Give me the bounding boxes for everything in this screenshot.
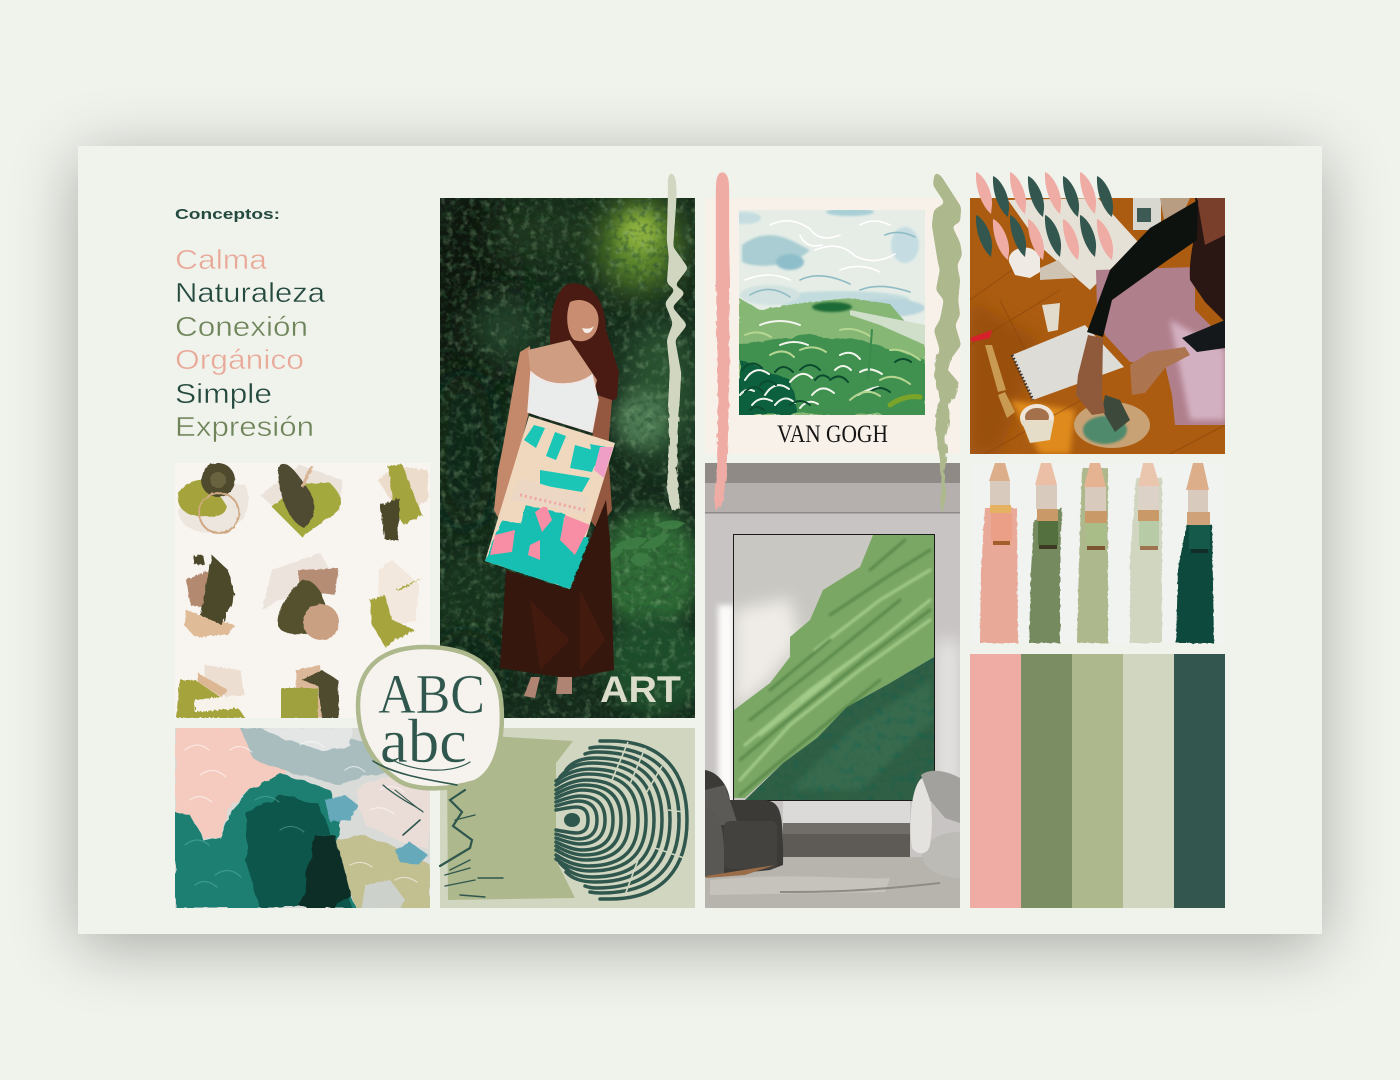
concept list: Naturaleza xyxy=(175,277,325,308)
panel: artist painting on floor xyxy=(970,198,1225,454)
fingerprint xyxy=(556,741,687,899)
framed artwork xyxy=(733,534,935,801)
coffee cup xyxy=(1020,404,1054,443)
mark 7: olive sweep xyxy=(176,665,245,718)
panel: paint brushes xyxy=(970,463,1225,643)
stroke: pale sage brush xyxy=(665,172,688,511)
floor boards xyxy=(970,250,1225,454)
lower field xyxy=(739,335,925,415)
concept list: Orgánico xyxy=(175,344,304,375)
concepts text block xyxy=(175,206,325,442)
brush 3 xyxy=(1084,463,1107,550)
paint: deep teal xyxy=(245,795,350,908)
skirt xyxy=(500,500,614,678)
hair xyxy=(1190,198,1225,322)
concept list: Calma xyxy=(175,244,267,275)
badge shape xyxy=(358,647,502,788)
paint: white top xyxy=(262,728,352,750)
leaf pattern xyxy=(976,172,1113,260)
ceiling bands xyxy=(705,463,960,483)
foliage background xyxy=(440,198,695,718)
text: ABC: ABC xyxy=(378,664,485,726)
panel: sage with fingerprint xyxy=(440,728,695,908)
arms xyxy=(494,346,532,525)
inner sage shape xyxy=(447,736,575,900)
brush strokes xyxy=(740,321,920,410)
concept list xyxy=(175,244,325,442)
pink trousers xyxy=(1096,267,1225,425)
brush cup xyxy=(1042,303,1060,332)
window light xyxy=(718,605,734,805)
stroke: sage brush xyxy=(932,172,962,512)
black sleeve xyxy=(1087,200,1198,337)
mark 6: olive splash xyxy=(370,560,422,648)
white canvas on floor xyxy=(1008,198,1138,290)
brush 2 xyxy=(1035,463,1058,549)
rag xyxy=(1040,260,1075,280)
camisole xyxy=(528,372,598,432)
concept list: Expresión xyxy=(175,411,314,442)
concept list: Conexión xyxy=(175,311,308,342)
heading: Conceptos: Conceptos: xyxy=(175,206,280,223)
paint: pale pink xyxy=(355,770,430,850)
woman figure xyxy=(485,283,619,698)
arm and hands xyxy=(1076,335,1105,415)
board card xyxy=(78,146,1322,934)
floor tones xyxy=(970,300,1040,454)
leaves row 1 xyxy=(976,172,1113,217)
swatch strokes xyxy=(980,468,1214,643)
left armchair xyxy=(705,770,783,878)
face xyxy=(567,300,599,341)
painting xyxy=(729,208,925,415)
sky clouds xyxy=(729,208,925,317)
impasto ridges xyxy=(185,741,417,882)
mark 8: olive square xyxy=(281,665,339,718)
paint: grey blue xyxy=(240,728,385,785)
feet xyxy=(524,677,572,698)
paint: blue accents xyxy=(325,795,428,865)
notebook xyxy=(1012,325,1124,400)
hills xyxy=(739,298,925,415)
floor xyxy=(705,857,960,908)
brush 1 xyxy=(989,463,1012,545)
panel: interior with green painting xyxy=(705,463,998,908)
panel: Van Gogh frame xyxy=(739,210,925,442)
mark 4: brown and dark block xyxy=(184,555,235,637)
label: ART: ART xyxy=(600,669,681,710)
chest xyxy=(528,340,597,386)
paint can xyxy=(1133,198,1161,230)
panel: brush marks xyxy=(175,463,430,718)
right armchair xyxy=(910,771,998,878)
small white cup xyxy=(1009,247,1040,278)
dark foreground xyxy=(739,360,800,415)
palette xyxy=(1074,395,1150,448)
held canvas xyxy=(485,416,615,589)
brush 4 xyxy=(1138,463,1160,550)
sky swirls xyxy=(745,221,915,297)
hair back xyxy=(550,283,619,405)
leaves at lower right xyxy=(605,520,685,567)
stroke: pink brush xyxy=(714,172,730,512)
label: VAN GOGH: VAN GOGH xyxy=(777,421,888,448)
brush 5 xyxy=(1186,463,1210,553)
mark 3: dry brush scratch xyxy=(378,464,428,540)
mark 1: olive with dark circle xyxy=(178,463,248,533)
far field xyxy=(850,310,925,345)
mark 5: triangle and tan circle xyxy=(262,553,339,640)
print breaks xyxy=(612,742,684,895)
paint: near black xyxy=(300,835,350,908)
paint: pink xyxy=(175,728,290,840)
paint: grey at bottom xyxy=(362,880,405,908)
rug corner xyxy=(1160,198,1190,225)
moodboard canvas xyxy=(175,172,1225,908)
panel: colour palette xyxy=(970,654,1225,908)
concept list: Simple xyxy=(175,378,272,409)
paint tubes xyxy=(985,345,1015,418)
dark green block xyxy=(745,657,934,800)
panel: photo of woman with canvas xyxy=(440,198,695,718)
paint: khaki xyxy=(335,835,430,908)
typography badge xyxy=(358,647,503,897)
text: abc: abc xyxy=(380,708,467,776)
paint: teal xyxy=(175,773,355,908)
light green fold xyxy=(734,535,934,798)
leaves row 2 xyxy=(976,215,1113,260)
panel: abstract impasto paint xyxy=(175,728,430,908)
mark 2: olive heart xyxy=(260,464,342,537)
calligraphic ink flourish xyxy=(373,756,503,897)
wall below art and bench xyxy=(783,801,910,823)
